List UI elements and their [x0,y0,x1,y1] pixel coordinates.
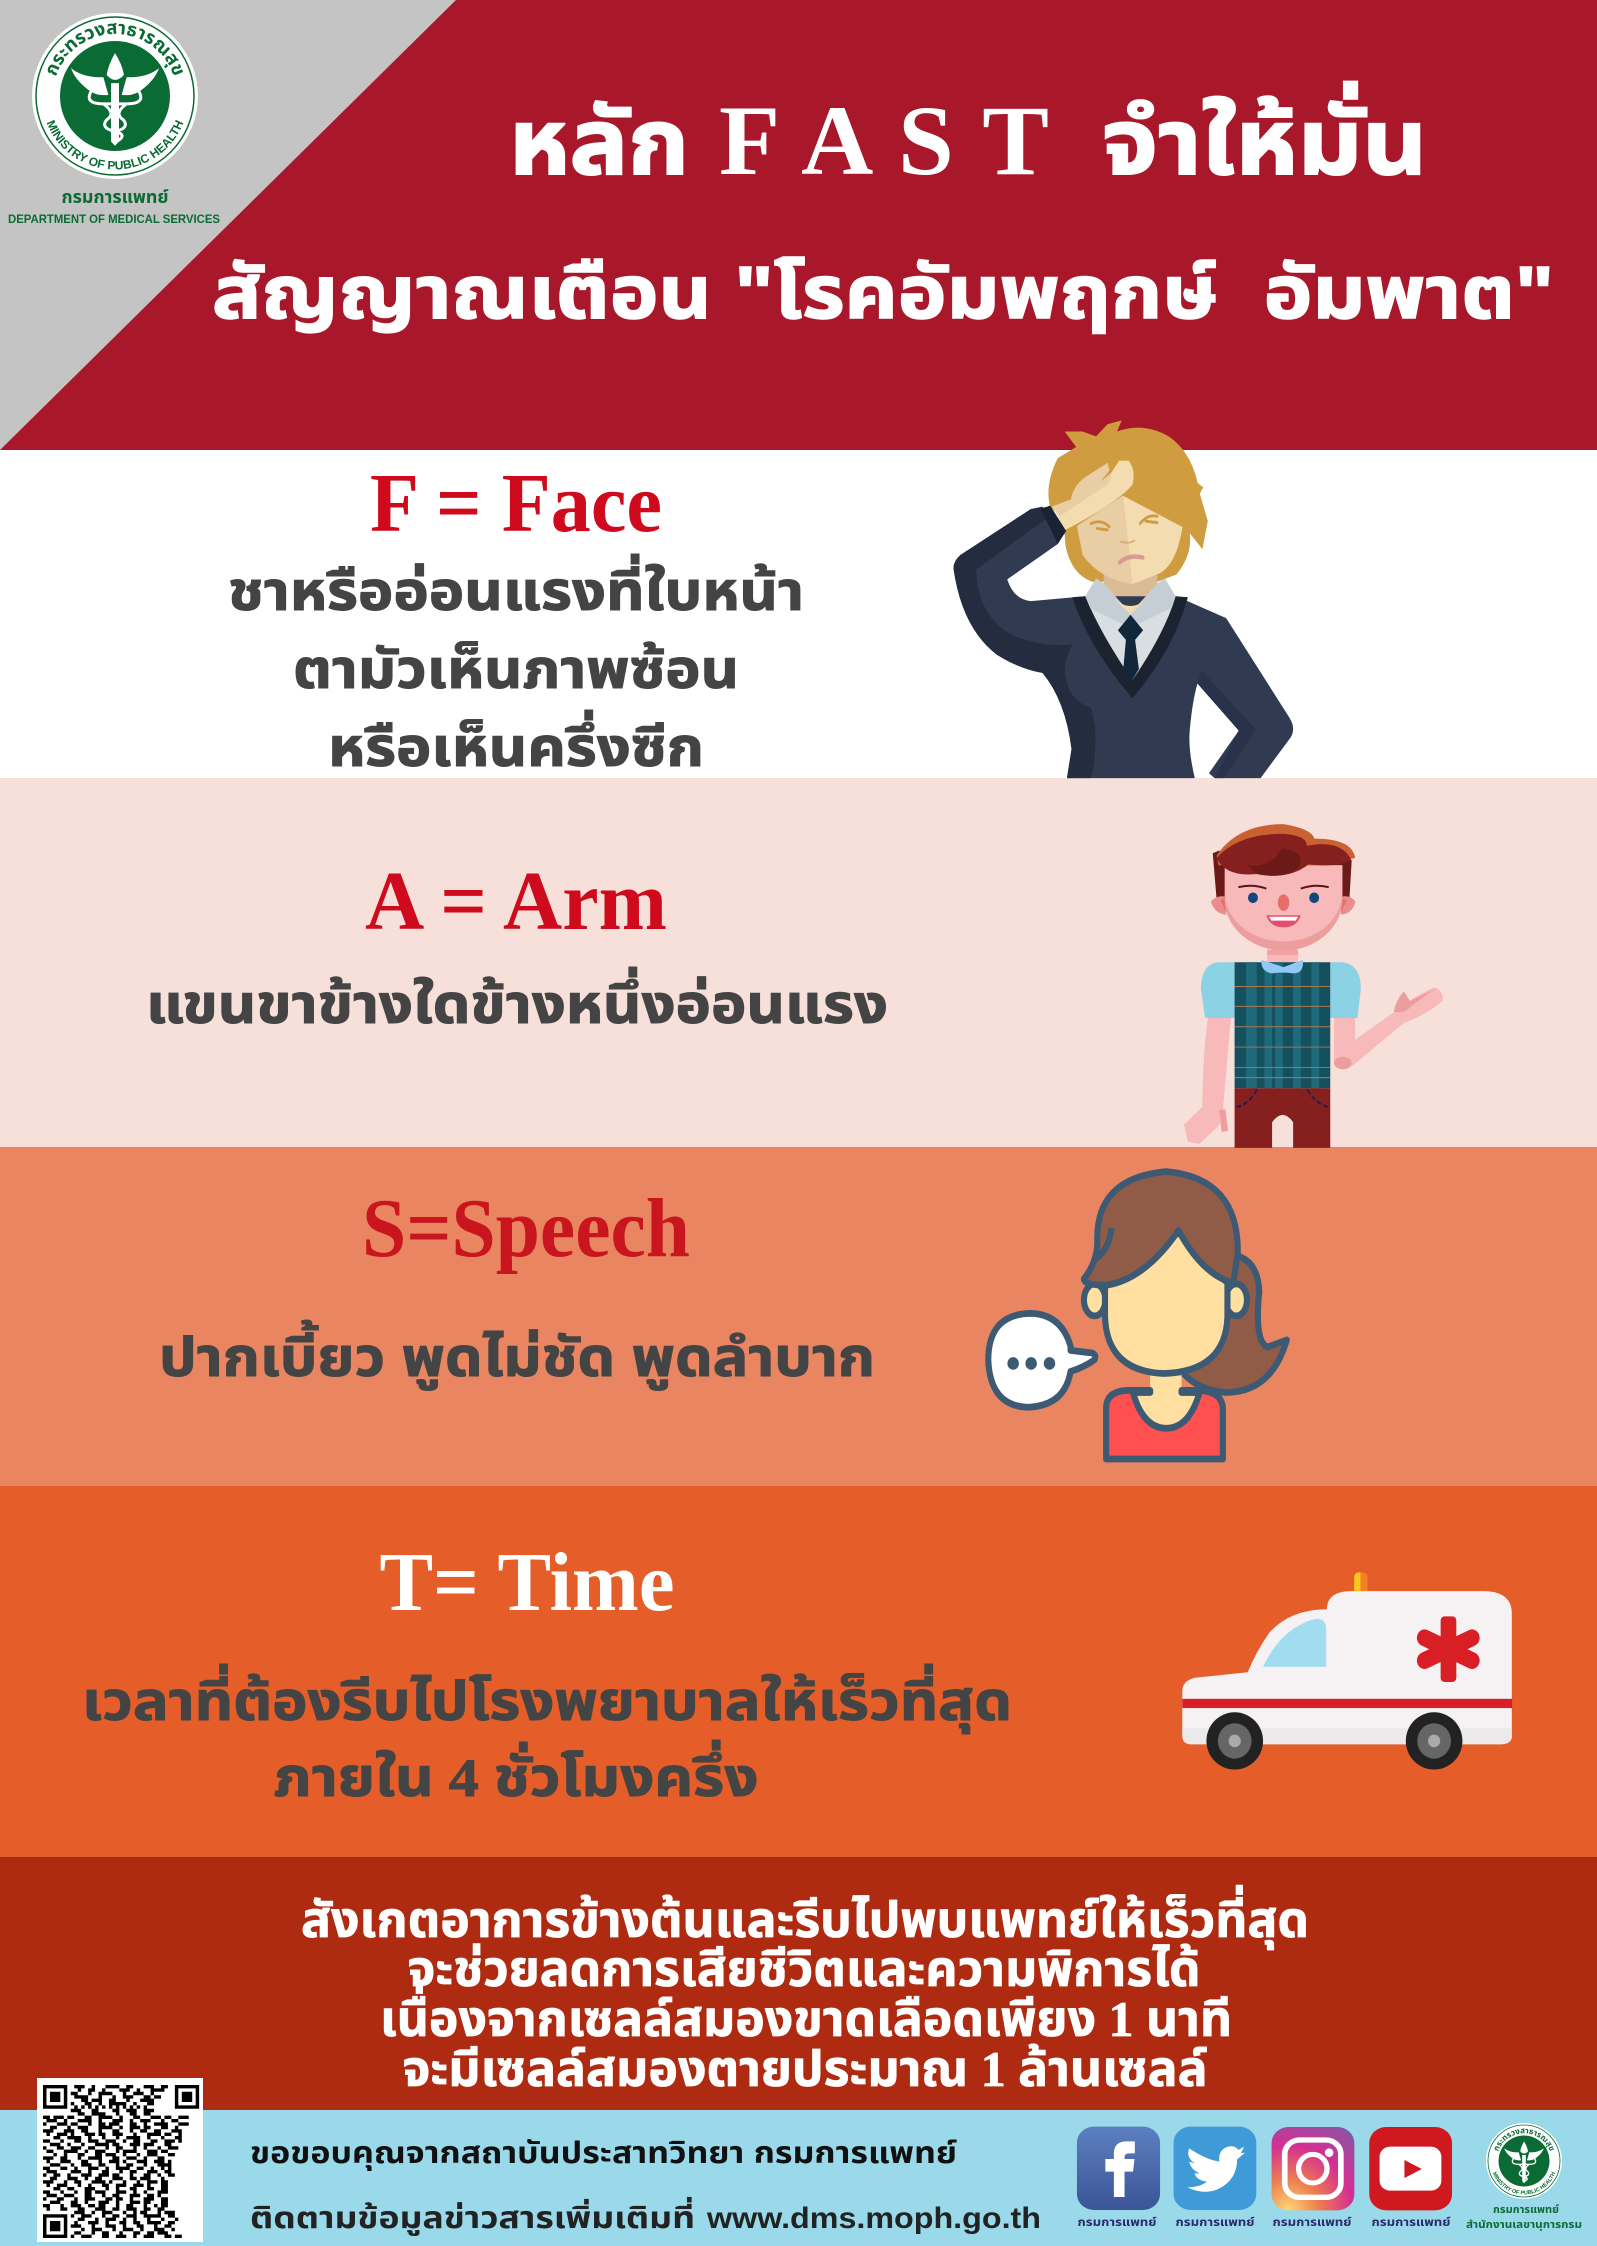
heading: S=Speech: S=Speech [362,1182,690,1275]
captions under social icons: กรมการแพทย์ [1372,2215,1451,2229]
text: note lines: สังเกตอาการข้างต้นและรีบไปพบแพทย์ให้เร็วที่สุด [301,1885,1309,1950]
logo: small department seal: กระทรวงสาธารณสุข [1494,2128,1554,2152]
illustration: woman with speech bubble [988,1172,1287,1459]
illustration: ambulance [1182,1572,1512,1770]
captions under social icons: กรมการแพทย์ [1176,2215,1255,2229]
QR code [37,2078,203,2242]
text: face symptoms: ตามัวเห็นภาพซ้อน [293,640,739,700]
title line 2: สัญญาณเตือน "โรคอัมพฤกษ์ อัมพาต" [212,251,1554,334]
text: note lines: จะมีเซลล์สมองตายประมาณ 1 ล้านเซลล์ [402,2041,1208,2097]
illustration: woman with hand on forehead [954,420,1293,778]
text: arm symptoms: แขนขาข้างใดข้างหนึ่งอ่อนแรง [146,967,888,1035]
panel: footer [0,2110,1597,2246]
text: credit: ขอขอบคุณจากสถาบันประสาทวิทยา กรมการแพทย์ [250,2137,957,2171]
icon: twitter [1174,2127,1256,2210]
logo: Ministry of Public Health: กระทรวงสาธารณสุข [48,23,183,76]
panel: header [0,0,1597,450]
text: website: www.dms.moph.go.th [706,2202,1041,2235]
title line 1: F A S T [719,85,1049,196]
text: face symptoms [228,554,804,778]
logo: Ministry of Public Health: MINISTRY OF PUBLIC HEALTH [46,120,184,170]
text: time advice [82,1664,1012,1808]
captions under social icons: กรมการแพทย์ [1078,2215,1157,2229]
heading: A = Arm: A = Arm [365,855,667,948]
text: website: ติดตามข้อมูลข่าวสารเพิ่มเติมที่ [250,2196,695,2236]
heading: T= Time: T= Time [380,1536,674,1629]
icon: instagram [1272,2127,1354,2210]
text: speech symptoms: ปากเบี้ยว พูดไม่ชัด พูดลำบาก [159,1320,875,1390]
title line 1: จำให้มั่น [1102,81,1427,194]
panel: A = Arm [0,778,1597,1147]
captions under social icons: กรมการแพทย์ [1272,2215,1352,2229]
logo: Ministry of Public Health: กรมการแพทย์ [62,187,169,207]
text: note lines [301,1885,1309,2097]
icon: youtube [1369,2127,1452,2210]
text: face symptoms: หรือเห็นครึ่งซีก [328,710,704,778]
text: time advice: ภายใน 4 ชั่วโมงครึ่ง [274,1740,758,1808]
logo: Ministry of Public Health [8,13,220,226]
logo: small department seal: MINISTRY OF PUBLIC HEALTH [1492,2172,1556,2194]
logo: small department seal: สำนักงานเลขานุการกรม [1466,2219,1582,2231]
text: website [250,2196,1041,2236]
panel: T = Time [0,1486,1597,1857]
title line 1 [509,81,1427,196]
heading: F = Face: F = Face [370,457,662,550]
text: note lines: เนื่องจากเซลล์สมองขาดเลือดเพียง 1 นาที [380,1984,1232,2047]
logo: Ministry of Public Health: DEPARTMENT OF MEDICAL SERVICES [8,212,220,226]
text: face symptoms: ชาหรืออ่อนแรงที่ใบหน้า [228,554,804,622]
panel: F = Face [0,450,1597,778]
panel: S = Speech [0,1147,1597,1486]
text: note lines: จะช่วยลดการเสียชีวิตและความพิการได้ [408,1941,1200,1997]
social icons row [1077,2127,1452,2210]
illustration: boy with weak arm [1184,824,1443,1148]
text: time advice: เวลาที่ต้องรีบไปโรงพยาบาลให้เร็วที่สุด [82,1664,1012,1734]
captions under social icons [1078,2215,1451,2229]
title line 1: หลัก [509,92,689,194]
logo: small department seal: กรมการแพทย์ [1493,2204,1559,2216]
panel: warning note [0,1857,1597,2110]
logo: small department seal [1466,2123,1582,2231]
icon: facebook [1077,2127,1160,2210]
